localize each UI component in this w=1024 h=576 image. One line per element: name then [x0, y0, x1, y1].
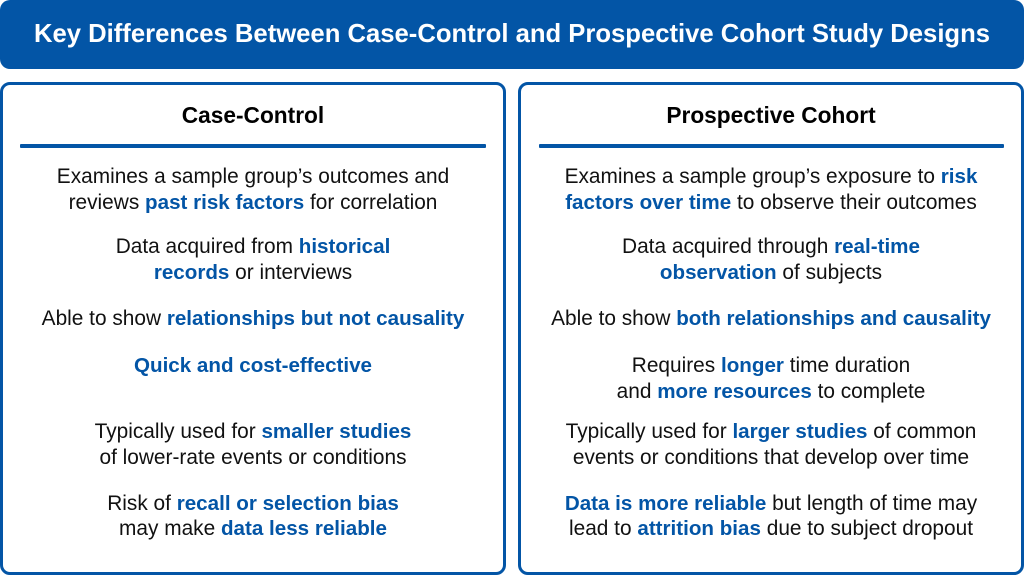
- text: reliability: Risk of recall or selection bias: [107, 492, 399, 514]
- text: cost and speed: [617, 354, 925, 403]
- text: data source: records or interviews: [154, 261, 352, 284]
- text: study approach: Examines a sample group’s exposure to risk: [565, 165, 977, 188]
- text: what it shows: Able to show both relationships and causality: [551, 307, 991, 330]
- text: study size: events or conditions that develop over time: [573, 446, 969, 469]
- text: reliability: [107, 492, 399, 540]
- text: data source: observation of subjects: [660, 261, 882, 284]
- panel: case-control: [0, 82, 506, 575]
- title banner: [0, 0, 1024, 69]
- panel: prospective cohort: [518, 82, 1024, 575]
- text: study size: of lower-rate events or conditions: [99, 446, 407, 469]
- text: study approach: reviews past risk factors for correlation: [69, 191, 437, 214]
- text: reliability: [565, 492, 978, 540]
- heading: prospective cohort: Prospective Cohort: [666, 102, 876, 128]
- text: study size: [95, 420, 411, 469]
- text: study approach: factors over time to observe their outcomes: [565, 191, 977, 214]
- text: reliability: Data is more reliable but length of time may: [565, 492, 977, 514]
- text: reliability: lead to attrition bias due to subject dropout: [569, 517, 973, 540]
- text: study size: Typically used for larger studies of common: [566, 420, 976, 443]
- text: data source: Data acquired from historical: [116, 235, 390, 258]
- text: cost and speed: Quick and cost-effective: [134, 354, 372, 377]
- text: what it shows: Able to show relationships but not causality: [42, 307, 464, 330]
- text: study size: [566, 420, 976, 469]
- text: study approach: [57, 165, 449, 214]
- heading: case-control: Case-Control: [182, 102, 324, 128]
- text: data source: [116, 235, 390, 284]
- text: data source: Data acquired through real-time: [622, 235, 920, 258]
- text: study approach: [565, 165, 978, 214]
- text: study approach: Examines a sample group’s outcomes and: [57, 165, 449, 188]
- title banner: Key Differences Between Case-Control and Prospective Cohort Study Designs: [34, 20, 990, 48]
- text: cost and speed: Requires longer time duration: [632, 354, 910, 377]
- text: study size: Typically used for smaller studies: [95, 420, 411, 443]
- text: data source: [622, 235, 920, 284]
- text: cost and speed: and more resources to complete: [617, 380, 925, 403]
- text: reliability: may make data less reliable: [119, 517, 387, 540]
